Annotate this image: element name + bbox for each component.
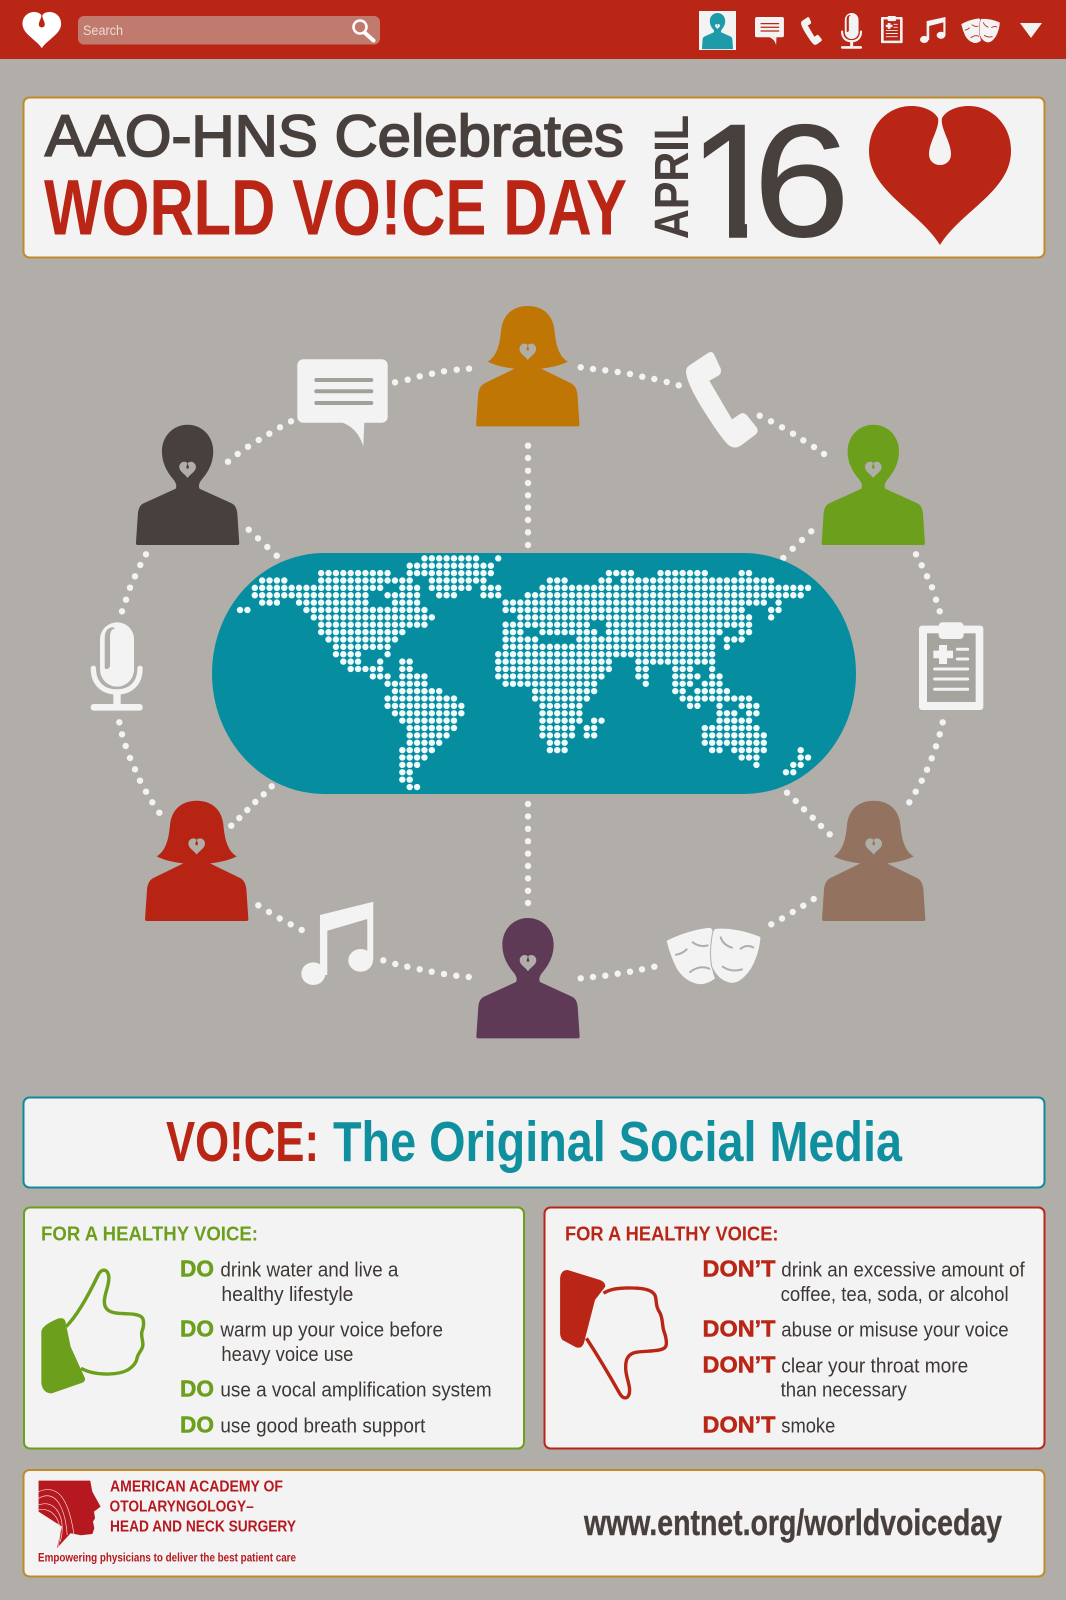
don't item 2: DON’T <box>702 1316 776 1342</box>
person: orange woman <box>476 306 579 426</box>
panel: voice banner <box>24 1098 1044 1188</box>
date: April: APRIL <box>646 115 699 239</box>
icon: small speech bubble <box>755 17 784 45</box>
do item 2: DO <box>180 1316 214 1342</box>
don't item 1: drink an excessive amount of <box>781 1260 1025 1282</box>
do item 4: DO <box>180 1412 214 1438</box>
icon: thumbs down <box>560 1270 666 1398</box>
icon: dropdown triangle <box>1020 23 1042 38</box>
heading: VOICE: VO!CE: <box>166 1110 319 1174</box>
don't item 1: DON’T <box>702 1256 776 1282</box>
icon: small microphone <box>841 13 862 49</box>
don't item 1 <box>702 1256 1025 1306</box>
icon: small phone <box>801 17 822 45</box>
tagline: Empowering physicians to deliver the best patient care <box>38 1553 296 1565</box>
do item 1: DO <box>180 1256 214 1282</box>
do item 3: DO <box>180 1376 214 1402</box>
date: 16: 1 <box>689 91 779 272</box>
icon: large heart <box>869 106 1011 245</box>
do item 1: drink water and live a <box>220 1260 399 1282</box>
do item 4 <box>180 1412 426 1438</box>
icon: clipboard <box>919 622 983 710</box>
don't item 4 <box>702 1411 835 1437</box>
dotted world map <box>240 558 809 787</box>
icon: telephone <box>686 352 758 448</box>
heading: The Original Social Media: The Original Social Media <box>333 1110 903 1174</box>
person: red woman <box>145 801 248 921</box>
world map pill <box>212 553 856 794</box>
person: dark man <box>136 425 239 545</box>
panel: footer <box>24 1470 1044 1576</box>
person: purple man <box>476 918 580 1038</box>
academy name <box>110 1479 296 1536</box>
do item 1: healthy lifestyle <box>221 1284 353 1306</box>
do item 4: use good breath support <box>220 1416 426 1438</box>
icon: thumbs up <box>41 1270 144 1393</box>
panel: don't list <box>544 1208 1044 1448</box>
icon: small music note <box>920 17 945 43</box>
person: green man <box>822 425 925 545</box>
heading: for a healthy voice: FOR A HEALTHY VOICE: <box>565 1224 778 1246</box>
logo: academy head <box>39 1481 101 1548</box>
don't item 3: than necessary <box>781 1380 907 1402</box>
do item 3: use a vocal amplification system <box>220 1380 492 1402</box>
icon: small theatre masks <box>961 18 1000 43</box>
academy name: OTOLARYNGOLOGY– <box>110 1499 254 1516</box>
search box <box>78 16 380 44</box>
do item 2 <box>180 1316 443 1366</box>
heading: for a healthy voice: FOR A HEALTHY VOICE: <box>41 1224 258 1246</box>
search box: Search <box>83 22 123 38</box>
person: brown woman <box>822 801 925 921</box>
icon: logo heart <box>22 12 61 48</box>
icon: speech bubble <box>297 359 388 446</box>
date: 16 <box>704 124 843 238</box>
heading: AAO-HNS Celebrates: AAO-HNS Celebrates <box>45 104 624 169</box>
top navigation bar <box>0 0 1066 59</box>
don't item 2 <box>702 1316 1009 1342</box>
don't item 3: clear your throat more <box>781 1355 968 1377</box>
do item 2: warm up your voice before <box>219 1320 443 1342</box>
do item 1 <box>180 1256 399 1306</box>
don't item 3 <box>702 1351 968 1402</box>
icon: profile avatar <box>699 11 736 50</box>
don't item 1: coffee, tea, soda, or alcohol <box>781 1284 1009 1306</box>
date: 16: 6 <box>753 93 850 270</box>
do item 2: heavy voice use <box>221 1344 353 1366</box>
don't item 4: smoke <box>781 1415 835 1437</box>
panel: title banner <box>22 96 1046 258</box>
icon: microphone <box>91 622 143 711</box>
don't item 3: DON’T <box>702 1351 776 1377</box>
icon: theatre masks <box>667 928 761 984</box>
icon: small clipboard <box>881 16 903 43</box>
icon: music note <box>301 902 373 985</box>
don't item 4: DON’T <box>702 1411 776 1437</box>
heading: World Voice Day: WORLD VO!CE DAY <box>44 162 627 252</box>
dotted connector network <box>119 367 943 978</box>
academy name: HEAD AND NECK SURGERY <box>110 1519 296 1536</box>
don't item 2: abuse or misuse your voice <box>781 1320 1009 1342</box>
academy name: AMERICAN ACADEMY OF <box>110 1479 283 1496</box>
panel: do list <box>24 1208 524 1448</box>
